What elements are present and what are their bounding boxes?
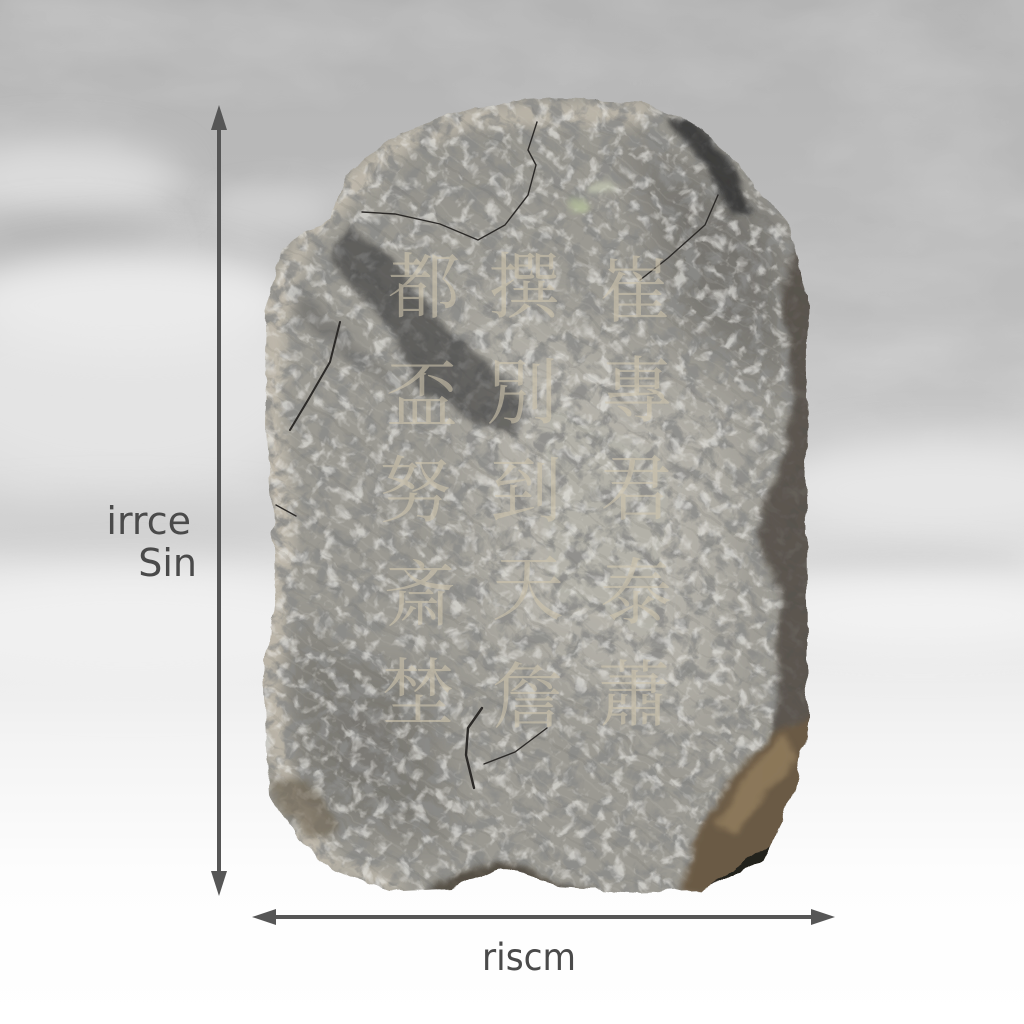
carved inscription: middle column <box>486 248 564 738</box>
width label: riscm <box>482 936 576 979</box>
carved inscription: middle column: 撰 <box>488 248 560 328</box>
top right shadow <box>665 118 752 215</box>
carved inscription: left column: 埜 <box>382 654 454 734</box>
dark right edge <box>755 240 815 775</box>
stone mottled texture <box>250 90 820 900</box>
carved inscription: middle column: 別 <box>486 354 558 434</box>
carved inscription: left column: 盃 <box>386 356 458 436</box>
diagonal streaks <box>264 102 790 890</box>
lower-left rock chips <box>268 780 340 840</box>
stone stele <box>250 90 820 900</box>
cracks <box>276 122 718 788</box>
carved inscription: middle column: 詹 <box>492 658 564 738</box>
carved inscription: middle column: 到 <box>490 452 562 532</box>
carved inscription: right column: 專 <box>601 352 673 432</box>
height label <box>106 499 197 585</box>
carved inscription: right column: 崔 <box>599 252 671 332</box>
lower right brown face <box>680 715 812 893</box>
carved inscription: left column: 斎 <box>384 556 456 636</box>
base shadow <box>710 846 770 886</box>
carved inscription: middle column: 天 <box>492 550 564 630</box>
carved inscription: right column: 泰 <box>600 554 672 634</box>
height label: irrce <box>106 499 191 543</box>
broad tonal washes <box>470 280 740 740</box>
height label: Sin <box>138 541 197 585</box>
lichen spot <box>569 196 587 214</box>
pale rim left and top <box>255 102 660 895</box>
width arrow <box>252 909 835 925</box>
carved inscription: right column <box>598 252 673 736</box>
stone body <box>250 90 820 900</box>
carved inscription: right column: 蕭 <box>598 656 670 736</box>
carved inscription: left column: 努 <box>379 452 451 532</box>
carved inscription: left column <box>379 248 460 734</box>
background: cloudy sky <box>0 0 1024 790</box>
carved inscription: right column: 君 <box>600 450 672 530</box>
carved inscription: left column: 都 <box>388 248 460 328</box>
height arrow <box>211 105 227 896</box>
diagonal cast shadow <box>330 225 524 438</box>
